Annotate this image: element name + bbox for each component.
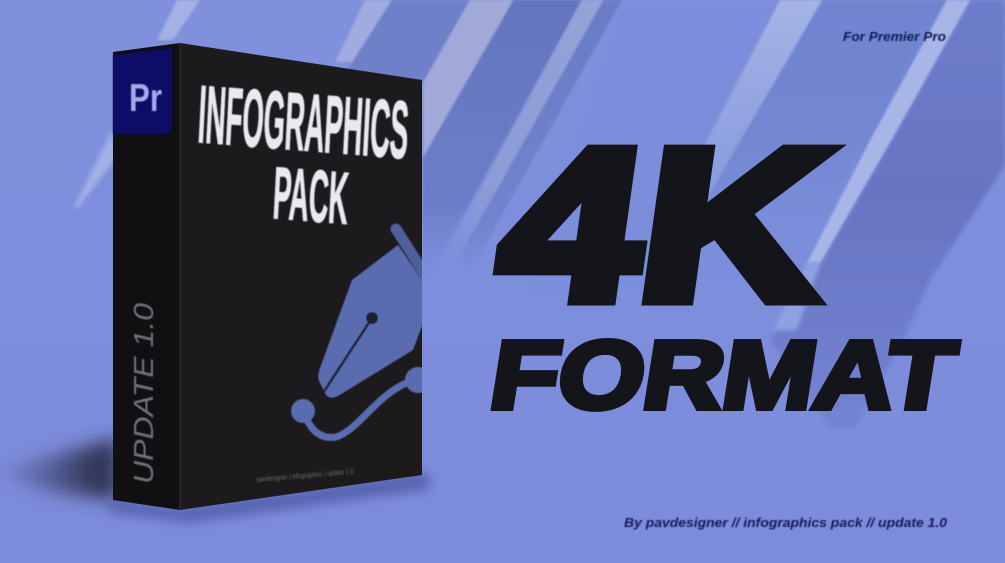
infographic scene: INFOGRAPHICS [196, 69, 411, 176]
software box [113, 43, 431, 510]
box footer text: pavdesigner | infographics | update 1.0 [256, 467, 354, 484]
Premiere Pro badge: Pr [129, 77, 162, 120]
Premiere Pro badge [113, 48, 172, 134]
box title: PACK [271, 151, 351, 240]
credit line: By pavdesigner // infographics pack // update 1.0 [624, 516, 947, 530]
background stripes [75, 0, 1005, 428]
box side face [113, 43, 180, 510]
box shadow [0, 438, 432, 522]
box edge [179, 43, 181, 510]
box front face [180, 43, 422, 510]
box title [196, 69, 411, 240]
headline: 4K: 4K [487, 104, 842, 345]
side label: UPDATE 1.0 [128, 303, 159, 484]
headline: FORMAT: FORMAT [484, 323, 963, 429]
caption: for premier pro: For Premier Pro [843, 30, 946, 44]
icon: pen tool [291, 229, 431, 437]
